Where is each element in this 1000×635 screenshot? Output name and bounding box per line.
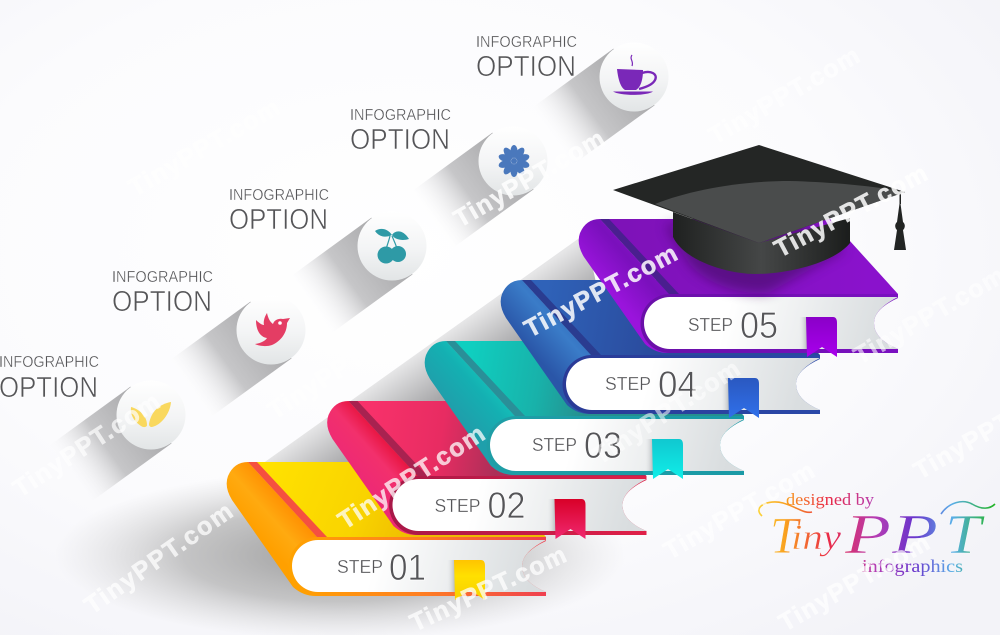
watermarks: TinyPPT.com <box>333 419 491 535</box>
page block <box>644 297 898 349</box>
long shadow 4 <box>412 133 534 248</box>
icon: cup <box>613 55 656 95</box>
cover panel <box>248 462 546 537</box>
logo swashes <box>759 502 995 516</box>
page block <box>490 419 744 471</box>
long shadow 2 <box>170 302 292 417</box>
label 2: OPTION <box>112 286 212 318</box>
spine <box>579 219 682 353</box>
option 4 <box>350 107 548 248</box>
cap base <box>673 212 850 274</box>
bookmark <box>721 378 759 418</box>
label 1: OPTION <box>0 372 98 404</box>
long shadow 3 <box>291 218 413 333</box>
watermarks: TinyPPT.com <box>406 540 572 635</box>
label: STEP <box>434 495 480 516</box>
label: 02 <box>488 485 526 526</box>
label 3: INFOGRAPHIC <box>229 187 329 204</box>
option 5 <box>476 34 668 164</box>
strap <box>248 462 327 537</box>
option 1 <box>0 354 186 502</box>
bookmark <box>447 560 485 600</box>
label <box>337 547 426 588</box>
disc 4 <box>478 126 548 196</box>
label 4: INFOGRAPHIC <box>350 107 451 124</box>
icon: leaves <box>131 402 171 427</box>
board highlight <box>655 181 905 243</box>
watermarks: TinyPPT.com <box>774 528 935 635</box>
spine <box>501 280 604 414</box>
spine <box>327 401 430 535</box>
cover edge <box>640 294 898 353</box>
label: 03 <box>584 425 622 466</box>
bookmark <box>548 499 586 539</box>
label: STEP <box>337 556 383 577</box>
cover edge <box>562 355 820 414</box>
cover panel <box>522 280 820 355</box>
label 1: INFOGRAPHIC <box>0 354 99 371</box>
logo wordmark <box>770 504 985 566</box>
icon: cherries <box>375 229 409 264</box>
logo wordmark: T <box>770 508 801 565</box>
cover panel <box>600 219 898 294</box>
stack shadow behind books <box>262 234 600 537</box>
cover edge <box>389 476 646 535</box>
book: step 05 <box>579 219 898 357</box>
label: STEP <box>688 314 733 335</box>
label 5: INFOGRAPHIC <box>476 34 577 51</box>
cover panel <box>348 401 646 476</box>
label 5 <box>476 34 577 83</box>
strap <box>522 280 601 355</box>
cover edge <box>486 416 744 475</box>
spine <box>425 341 528 475</box>
label 3: OPTION <box>229 204 328 236</box>
label <box>532 425 622 466</box>
watermarks: TinyPPT.com <box>704 41 865 150</box>
strap <box>600 219 679 294</box>
cover panel <box>446 341 744 416</box>
icon: bird <box>255 313 290 346</box>
cap shadow on book <box>665 222 845 293</box>
watermarks: TinyPPT.com <box>770 159 933 263</box>
label 2: INFOGRAPHIC <box>112 269 213 286</box>
watermarks: TinyPPT.com <box>449 124 610 233</box>
watermarks: TinyPPT.com <box>124 93 285 202</box>
book: step 01 <box>227 462 546 600</box>
option 2 <box>112 269 306 417</box>
page block <box>392 479 646 531</box>
disc 5 <box>600 42 668 112</box>
label: STEP <box>605 373 651 394</box>
graduation cap <box>613 145 906 293</box>
label <box>605 364 697 405</box>
bookmark <box>799 317 837 357</box>
page block <box>292 540 546 592</box>
option 3 <box>229 187 426 333</box>
strap <box>446 341 525 416</box>
mortarboard <box>613 145 905 243</box>
bookmark <box>645 439 683 479</box>
logo bottom line: infographics <box>862 556 963 576</box>
logo wordmark: T <box>945 504 985 566</box>
label <box>688 305 778 346</box>
label: STEP <box>532 434 577 455</box>
label 1 <box>0 354 99 404</box>
logo wordmark: P <box>844 504 891 566</box>
label: 04 <box>658 364 697 405</box>
logo wordmark: iny <box>791 517 841 557</box>
label 4 <box>350 107 451 156</box>
label 3 <box>229 187 329 236</box>
label <box>434 485 526 526</box>
book: step 04 <box>501 280 820 418</box>
spine <box>227 462 330 596</box>
disc 2 <box>236 296 306 364</box>
watermarks: TinyPPT.com <box>79 497 239 620</box>
label: 05 <box>740 305 778 346</box>
watermarks: TinyPPT.com <box>520 239 683 343</box>
logo: designed by TinyPPT infographics <box>759 490 995 576</box>
label 2 <box>112 269 213 318</box>
logo wordmark: P <box>891 504 938 566</box>
watermarks: TinyPPT.com <box>8 387 166 503</box>
label 4: OPTION <box>350 124 450 156</box>
long shadow 1 <box>50 387 172 502</box>
label: 01 <box>389 547 426 588</box>
ground shadow under books <box>55 470 625 635</box>
icon: flower <box>498 145 530 177</box>
watermarks: TinyPPT.com <box>659 456 820 565</box>
watermarks: TinyPPT.com <box>263 309 421 425</box>
logo small top line: designed by <box>786 490 875 509</box>
book: step 03 <box>425 341 744 479</box>
strap <box>348 401 428 476</box>
watermarks: TinyPPT.com <box>588 354 746 470</box>
cover edge <box>288 537 546 596</box>
page block <box>566 358 820 410</box>
book: step 02 <box>327 401 646 539</box>
long shadow 5 <box>533 49 655 164</box>
disc 3 <box>358 212 426 280</box>
disc 1 <box>116 380 186 450</box>
tassel <box>894 192 906 250</box>
label 5: OPTION <box>476 51 576 83</box>
